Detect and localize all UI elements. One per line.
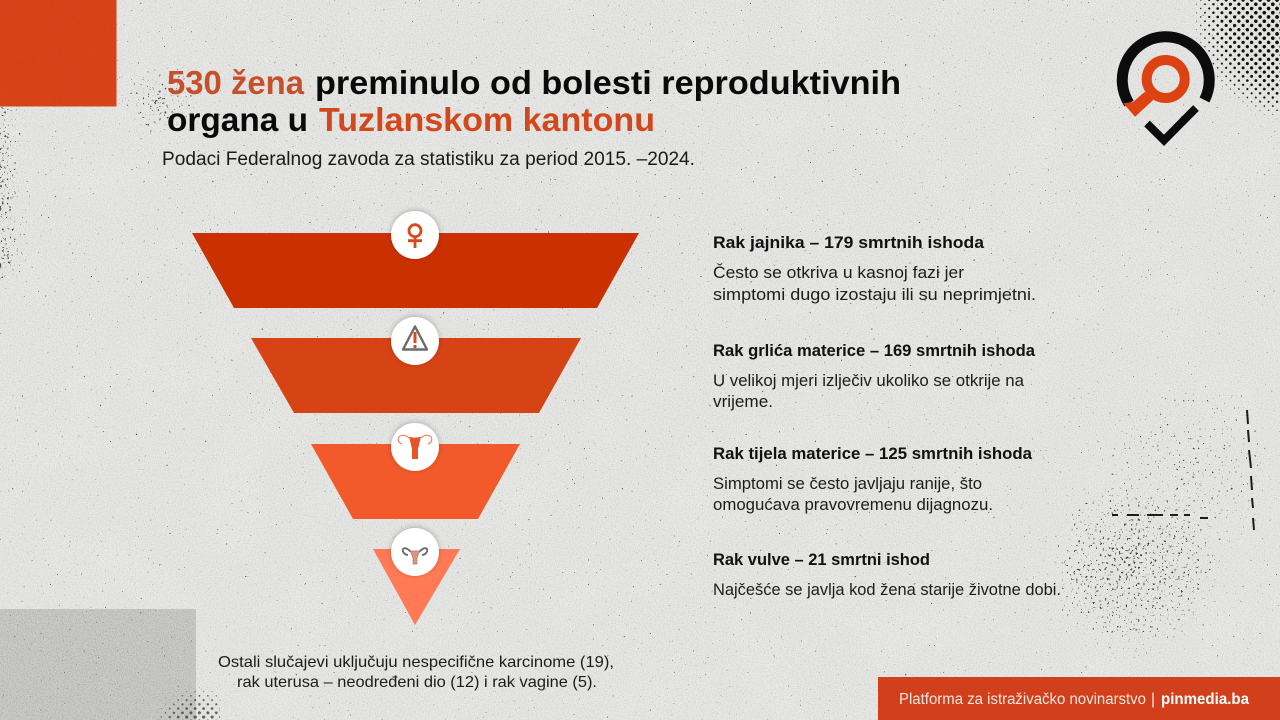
text block: rak tijela materice: Rak tijela materice – 125 smrtnih ishoda (713, 444, 1033, 463)
text block: rak vulve: Rak vulve – 21 smrtni ishod (713, 550, 930, 569)
halftone bottom left (152, 686, 220, 720)
text block: rak jajnika: Rak jajnika – 179 smrtnih ishoda (713, 233, 985, 252)
text block: rak vulve (713, 550, 1061, 599)
text block: rak jajnika: Često se otkriva u kasnoj fazi jer (713, 263, 964, 282)
orange corner block (0, 0, 116, 106)
icon: venus symbol (391, 211, 439, 259)
funnel tier 2: rak grlića materice (251, 338, 581, 413)
logo (1122, 37, 1209, 140)
footer bar: | (1151, 691, 1155, 708)
text block: rak grlića materice: Rak grlića materice – 169 smrtnih ishoda (713, 341, 1036, 360)
note: other cases (218, 654, 614, 691)
note: other cases: Ostali slučajevi uključuju nespecifične karcinome (19), (218, 654, 614, 671)
icon: uterus (391, 423, 439, 471)
text block: rak tijela materice: omogućava pravovremenu dijagnozu. (713, 495, 993, 514)
text block: rak grlića materice: U velikoj mjeri izlječiv ukoliko se otkrije na (713, 371, 1025, 390)
icon: uterus outline (391, 528, 439, 576)
title (167, 64, 901, 138)
note: other cases: rak uterusa – neodređeni dio (12) i rak vagine (5). (237, 674, 597, 691)
title: preminulo od bolesti reproduktivnih (315, 64, 901, 101)
footer bar: pinmedia.ba (1161, 691, 1249, 708)
text block: rak grlića materice: vrijeme. (713, 392, 773, 411)
text block: rak grlića materice (713, 341, 1036, 411)
grey block bottom left (0, 609, 196, 720)
title: Tuzlanskom kantonu (319, 101, 655, 138)
text block: rak jajnika: simptomi dugo izostaju ili su neprimjetni. (713, 285, 1036, 304)
footer bar (878, 677, 1280, 720)
title: organa u (167, 101, 308, 138)
text block: rak tijela materice: Simptomi se često javljaju ranije, što (713, 474, 982, 493)
halftone top right (1192, 0, 1280, 120)
subtitle: Podaci Federalnog zavoda za statistiku za period 2015. –2024. (162, 149, 695, 170)
footer bar: Platforma za istraživačko novinarstvo (899, 691, 1146, 708)
funnel chart (192, 211, 639, 625)
text block: rak jajnika (713, 233, 1036, 304)
funnel tier 4: rak vulve (373, 549, 460, 625)
title: 530 žena (167, 64, 305, 101)
text block: rak vulve: Najčešće se javlja kod žena starije životne dobi. (713, 580, 1061, 599)
icon: warning triangle (391, 317, 439, 365)
text block: rak tijela materice (713, 444, 1033, 514)
funnel tier 1: rak jajnika (192, 233, 639, 308)
funnel tier 3: rak tijela materice (311, 444, 520, 519)
